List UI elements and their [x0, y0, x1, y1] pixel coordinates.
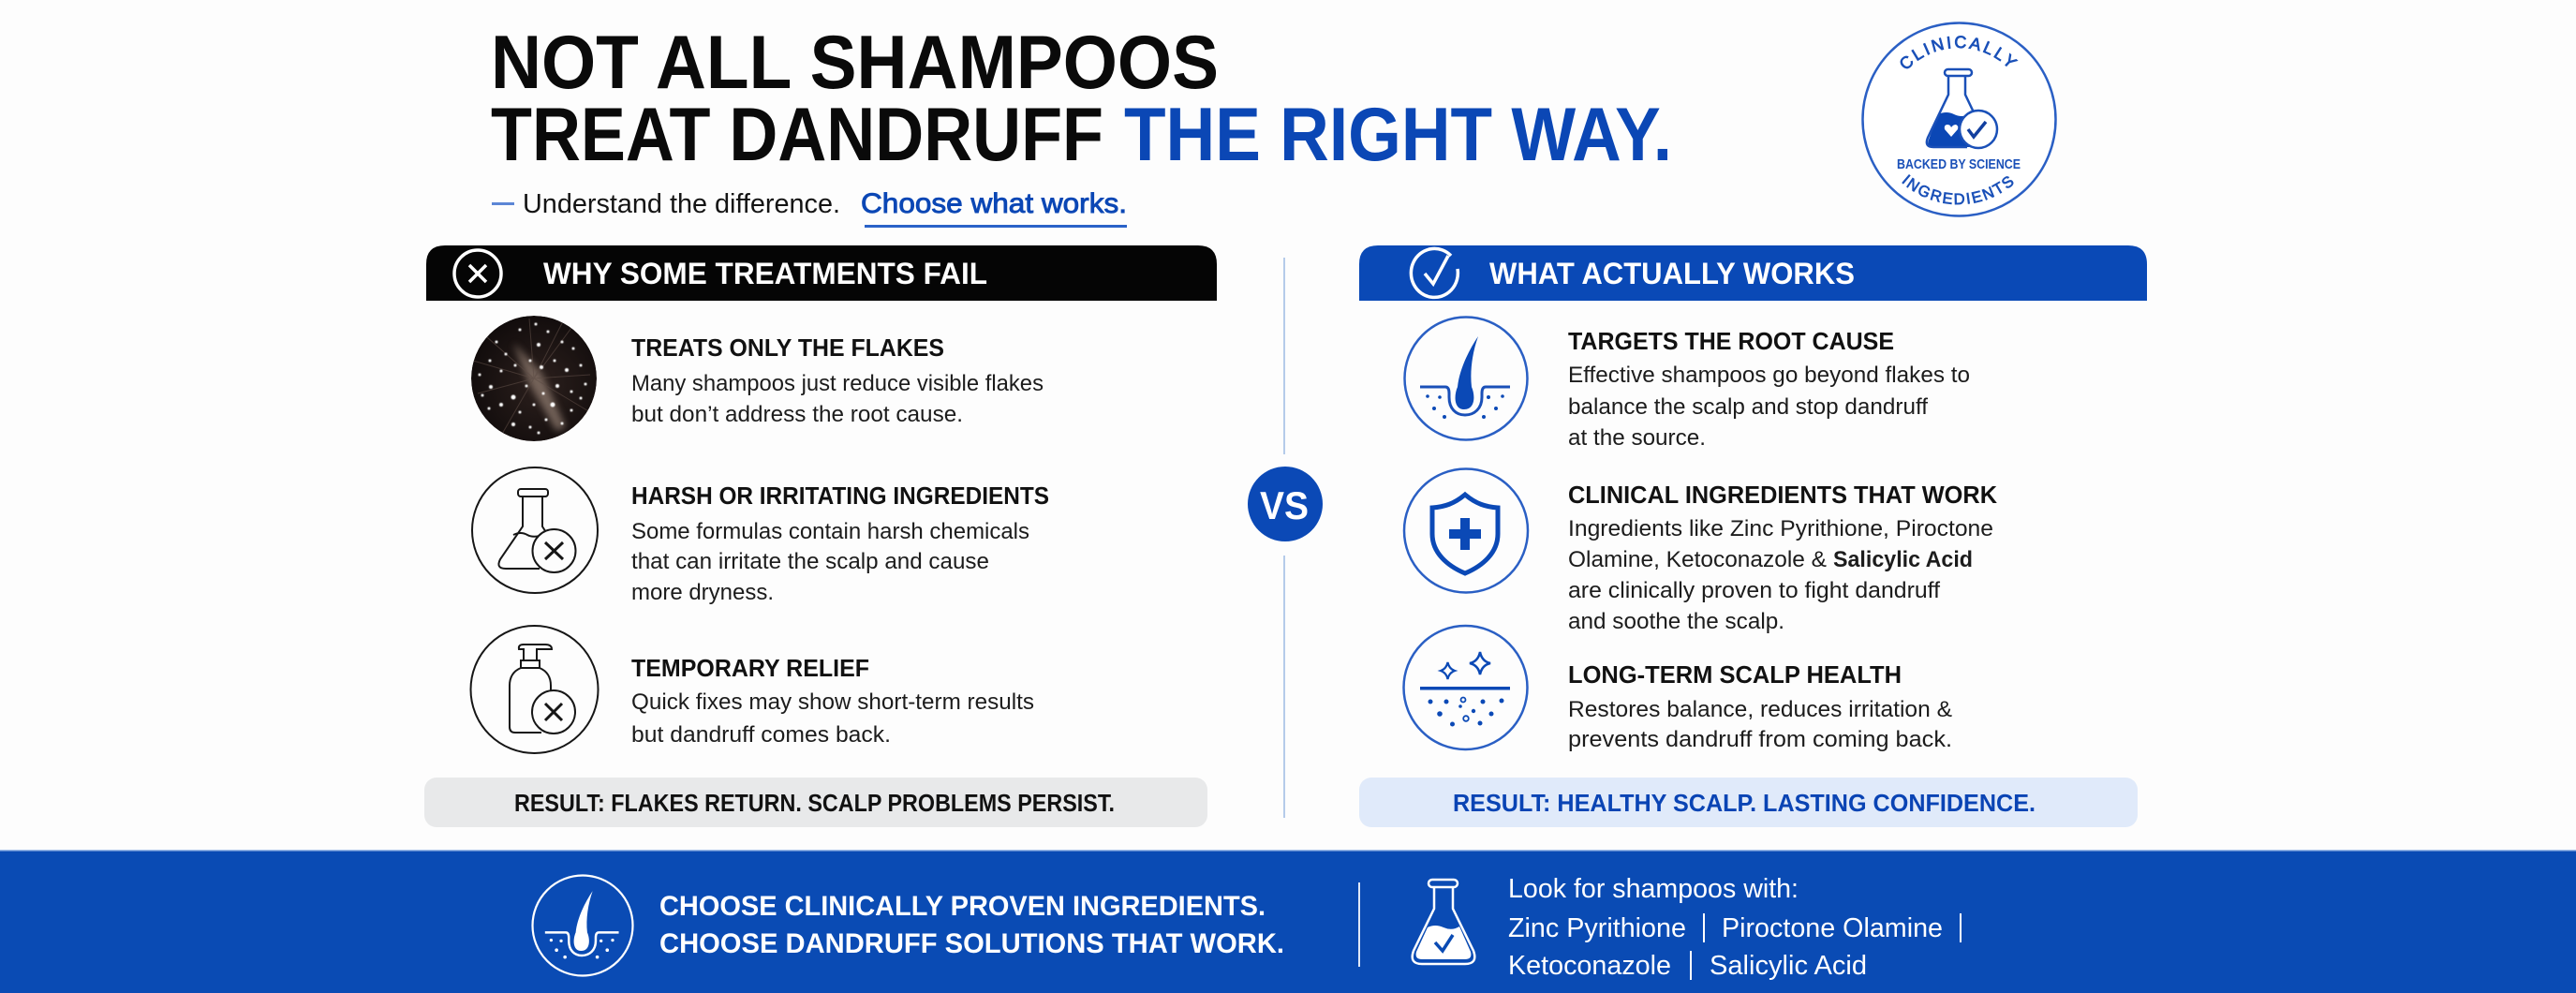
header bar: why some treatments fail — [426, 245, 1217, 301]
icon: scalp photo with flakes — [471, 316, 597, 441]
subtitle — [492, 188, 1127, 228]
icon: shield with plus — [1404, 468, 1528, 592]
footer headline: CHOOSE DANDRUFF SOLUTIONS THAT WORK. — [659, 928, 1284, 959]
title: THE RIGHT WAY. — [1124, 93, 1672, 177]
item text: treats only the flakes: TREATS ONLY THE FLAKES — [631, 335, 944, 362]
item text: temporary relief: Quick fixes may show short-term results — [631, 689, 1034, 715]
item text: clinical ingredients that work: CLINICAL INGREDIENTS THAT WORK — [1568, 482, 1998, 509]
header bar: what actually works: WHAT ACTUALLY WORKS — [1489, 257, 1855, 290]
panel: what actually works — [1359, 245, 2147, 827]
icon: hair follicle — [1405, 317, 1527, 440]
icon: pump bottle with x — [470, 626, 598, 753]
icon: flask with x — [472, 467, 598, 593]
item text: clinical ingredients that work: are clinically proven to fight dandruff — [1568, 578, 1940, 603]
footer headline: CHOOSE CLINICALLY PROVEN INGREDIENTS. — [659, 891, 1266, 922]
item text: treats only the flakes — [631, 335, 1044, 427]
item text: targets the root cause: TARGETS THE ROOT CAUSE — [1568, 329, 1894, 355]
item text: targets the root cause — [1568, 329, 1970, 451]
footer banner — [0, 850, 2576, 993]
footer ingredients list: Salicylic Acid — [1710, 951, 1867, 981]
footer headline — [659, 891, 1284, 959]
item text: clinical ingredients that work: and soothe the scalp. — [1568, 609, 1784, 634]
subtitle: Choose what works. — [861, 188, 1127, 219]
badge: clinically backed by science: BACKED BY SCIENCE — [1897, 157, 2021, 172]
title — [491, 21, 1672, 177]
item text: harsh or irritating ingredients: HARSH OR IRRITATING INGREDIENTS — [631, 483, 1049, 510]
footer ingredients list: Piroctone Olamine — [1722, 913, 1943, 943]
icon: sparkles over healthy scalp — [1403, 626, 1527, 749]
item text: clinical ingredients that work — [1568, 482, 1998, 634]
item text: harsh or irritating ingredients — [631, 483, 1049, 605]
item text: harsh or irritating ingredients: more dryness. — [631, 580, 774, 605]
header bar: why some treatments fail: WHY SOME TREATMENTS FAIL — [543, 257, 987, 290]
badge: clinically backed by science: CLINICALLY — [1900, 36, 2018, 69]
item text: temporary relief: but dandruff comes back. — [631, 722, 891, 748]
item text: targets the root cause: balance the scalp and stop dandruff — [1568, 394, 1928, 420]
item text: temporary relief: TEMPORARY RELIEF — [631, 656, 869, 682]
item text: clinical ingredients that work: Olamine, Ketoconazole & — [1568, 547, 1827, 572]
footer ingredients list: Look for shampoos with: — [1508, 874, 1799, 904]
item text: long-term scalp health: Restores balance, reduces irritation & — [1568, 697, 1952, 722]
badge: clinically backed by science: INGREDIENTS — [1902, 174, 2014, 204]
icon: footer hair follicle — [532, 875, 633, 976]
item text: long-term scalp health: prevents dandruff from coming back. — [1568, 727, 1952, 752]
item text: targets the root cause: Effective shampoos go beyond flakes to — [1568, 363, 1970, 388]
item text: long-term scalp health — [1568, 662, 1952, 752]
footer ingredients list: Zinc Pyrithione — [1508, 913, 1686, 943]
header bar: what actually works — [1359, 245, 2147, 301]
title: TREAT DANDRUFF — [491, 93, 1103, 177]
result bar: healthy scalp — [1359, 778, 2138, 827]
item text: long-term scalp health: LONG-TERM SCALP HEALTH — [1568, 662, 1902, 689]
item text: harsh or irritating ingredients: that can irritate the scalp and cause — [631, 549, 989, 574]
result bar: flakes return — [424, 778, 1207, 827]
vs divider — [1248, 258, 1323, 818]
footer ingredients list: Ketoconazole — [1508, 951, 1671, 981]
item text: harsh or irritating ingredients: Some formulas contain harsh chemicals — [631, 519, 1029, 544]
result bar: healthy scalp: RESULT: HEALTHY SCALP. LASTING CONFIDENCE. — [1453, 791, 2036, 817]
vs divider: VS — [1260, 483, 1309, 527]
result bar: flakes return: RESULT: FLAKES RETURN. SCALP PROBLEMS PERSIST. — [514, 791, 1115, 817]
item text: temporary relief — [631, 656, 1034, 748]
footer ingredients list — [1508, 874, 1962, 981]
item text: treats only the flakes: Many shampoos just reduce visible flakes — [631, 371, 1044, 396]
item text: clinical ingredients that work: Salicylic Acid — [1833, 547, 1973, 572]
icon: footer flask with check — [1413, 880, 1474, 964]
title: NOT ALL SHAMPOOS — [491, 21, 1219, 105]
subtitle: Understand the difference. — [523, 189, 840, 219]
item text: clinical ingredients that work: Ingredients like Zinc Pyrithione, Piroctone — [1568, 516, 1993, 541]
item text: targets the root cause: at the source. — [1568, 425, 1706, 451]
panel: why some treatments fail — [424, 245, 1217, 827]
badge: clinically backed by science — [1861, 22, 2057, 217]
item text: treats only the flakes: but don’t address the root cause. — [631, 402, 963, 427]
